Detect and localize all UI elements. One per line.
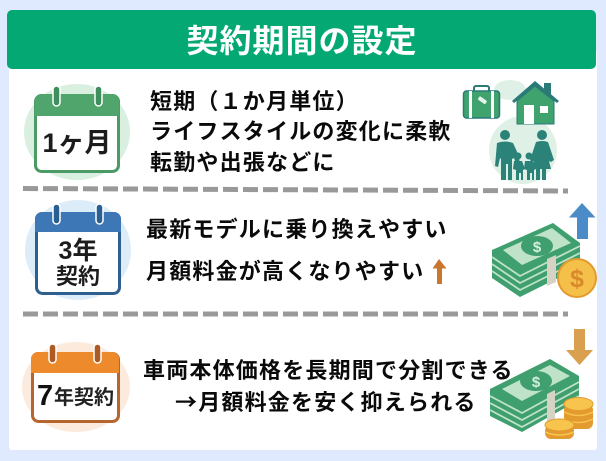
row: 7 year contract: [22, 329, 593, 439]
text: 7 year description: 車両本体価格を長期間で分割できる: [143, 358, 514, 383]
icon: green calendar: [24, 84, 130, 180]
text: 1 month description: ライフスタイルの変化に柔軟: [150, 119, 452, 144]
icon: suitcase, house and family: [464, 80, 559, 184]
text: 1 month description: [150, 89, 452, 175]
text: 1 month description: 転勤や出張などに: [150, 150, 336, 175]
icon: blue calendar: 契約: [56, 264, 100, 289]
icon: green calendar: 1ヶ月: [42, 128, 112, 158]
icon: small orange up arrow: [432, 259, 446, 284]
icon: orange calendar: [22, 342, 130, 432]
text: 7 year description: →月額料金を安く抑えられる: [175, 385, 477, 417]
text: 1 month description: 短期（１か月単位）: [150, 89, 359, 114]
icon: banknotes and coin: $: [570, 265, 584, 293]
text: 7 year description: [143, 358, 514, 417]
icon: banknotes and coin: [492, 223, 596, 297]
title banner: [7, 10, 596, 69]
icon: blue calendar: 3年: [59, 237, 97, 265]
row: 1 month contract: [24, 80, 559, 184]
text: 3 year description: [146, 217, 448, 284]
divider 2: [23, 312, 568, 316]
divider 1: [23, 188, 568, 191]
row: 3 year contract: [25, 200, 596, 300]
title banner: 契約期間の設定: [186, 23, 418, 59]
icon: banknotes and coin: $: [533, 239, 542, 256]
text: 3 year description: 月額料金が高くなりやすい: [146, 259, 424, 284]
icon: orange down arrow: [566, 329, 593, 365]
icon: blue up arrow: [569, 203, 596, 239]
icon: orange calendar: 7: [37, 380, 53, 412]
icon: orange calendar: 年契約: [54, 386, 114, 409]
icon: banknotes and coin stacks: $: [532, 374, 541, 391]
icon: blue calendar: [25, 200, 131, 300]
text: 3 year description: 最新モデルに乗り換えやすい: [146, 217, 448, 242]
icon: banknotes and coin stacks: [490, 359, 593, 439]
